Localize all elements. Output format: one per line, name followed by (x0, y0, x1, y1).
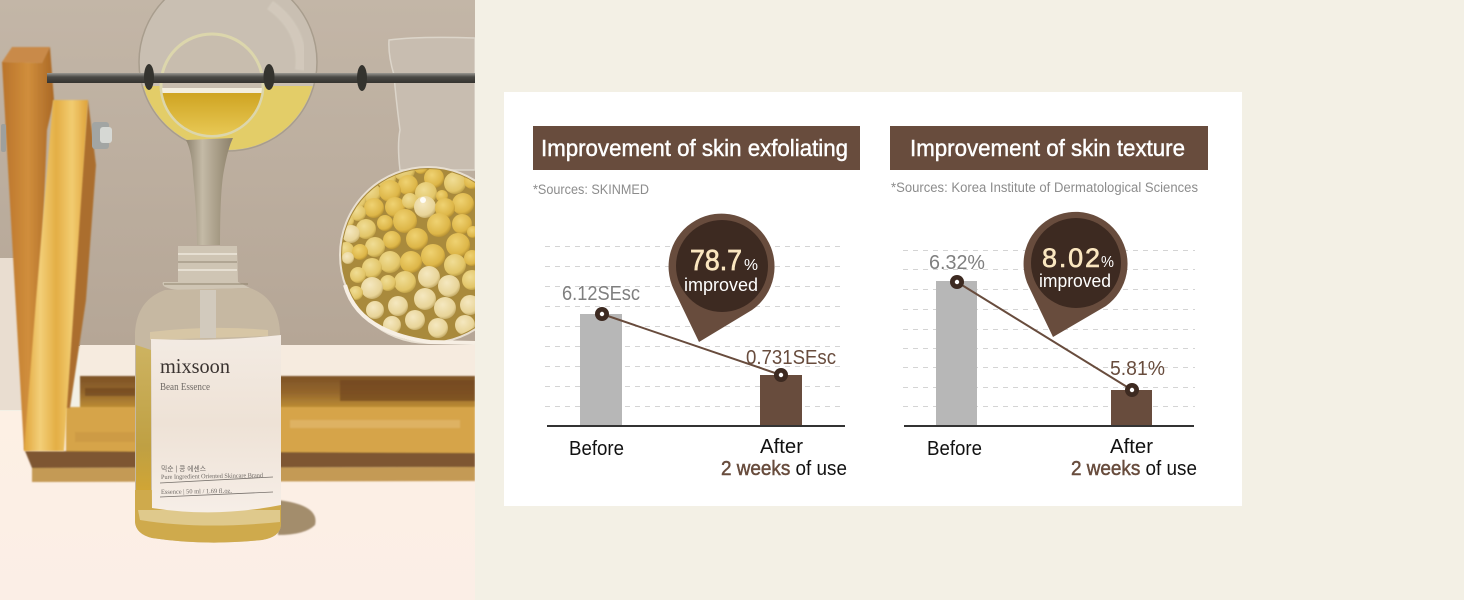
bottle shadow (278, 500, 316, 535)
heading bar: texture (890, 126, 1208, 170)
callout: 78.7% improved: improved (684, 275, 758, 295)
axis label: after 2 weeks of use: 2 weeks of use (1071, 458, 1197, 480)
callout: 8.02% improved: 8.02 (1042, 243, 1100, 273)
metal bolt (1, 122, 112, 152)
korean product name: 믹순 | 콩 에센스 (161, 464, 207, 473)
bottle neck (163, 246, 250, 290)
wall backdrop (0, 0, 475, 346)
bar: after 0.731SEsc (760, 375, 802, 425)
axis label: before: Before (927, 438, 982, 460)
panel: skin exfoliating chart (533, 126, 860, 480)
wooden upright, dark back piece (2, 47, 96, 450)
right flask neck (389, 37, 475, 170)
callout: 8.02% improved (1024, 212, 1128, 337)
brand name: mixsoon (160, 354, 230, 378)
product name: Bean Essence (160, 382, 210, 393)
bar: before 6.12SEsc (580, 314, 622, 425)
axis label: after 2 weeks of use (1071, 436, 1197, 480)
callout: 78.7% improved: % (744, 257, 758, 274)
axis label: before: Before (569, 438, 624, 460)
axis label: after 2 weeks of use: 2 weeks of use (721, 458, 847, 480)
axis label: after 2 weeks of use: After (760, 436, 803, 458)
axis label: after 2 weeks of use (721, 436, 847, 480)
callout: 8.02% improved: % (1101, 254, 1114, 271)
large round flask with oil (138, 0, 318, 152)
callout: 78.7% improved (669, 214, 775, 342)
wooden upright, light front piece (24, 100, 88, 451)
heading bar: exfoliating (533, 126, 860, 170)
bottle glass body (135, 288, 281, 543)
tagline: Pure Ingredient Oriented Skincare Brand (161, 472, 264, 481)
metal rod with rubber rings (47, 64, 475, 91)
callout: 78.7% improved: 78.7 (690, 245, 742, 277)
value: after: 0.731SEsc (746, 346, 836, 369)
photo: product still life with bottle, flasks and soybeans (0, 0, 516, 600)
bar: after 5.81% (1111, 390, 1152, 425)
white table surface (0, 258, 475, 600)
heading bar: exfoliating: Improvement of skin exfoliating (541, 135, 848, 161)
right flask with soybeans (339, 166, 475, 345)
trend line with markers (595, 307, 788, 382)
heading bar: texture: Improvement of skin texture (910, 135, 1185, 161)
callout: 8.02% improved: improved (1039, 271, 1111, 291)
bottle label (151, 335, 281, 512)
value: before: 6.32% (929, 251, 985, 274)
volume line: Essence | 50 ml / 1.69 fl.oz. (161, 488, 232, 496)
source note: SKINMED: *Sources: SKINMED (533, 182, 649, 197)
wooden base beam (25, 376, 475, 482)
serum bottle (135, 246, 281, 543)
bar: before 6.32% (936, 281, 977, 425)
axis label: after 2 weeks of use: After (1110, 436, 1153, 458)
trend line with markers (950, 275, 1139, 397)
panel: skin texture chart (890, 126, 1208, 480)
source note: Korea Institute: *Sources: Korea Institute of Dermatological Sciences (891, 180, 1198, 195)
value: before: 6.12SEsc (562, 282, 640, 305)
funnel stem (186, 138, 233, 245)
white chart panel (504, 92, 1242, 506)
value: after: 5.81% (1110, 357, 1165, 380)
